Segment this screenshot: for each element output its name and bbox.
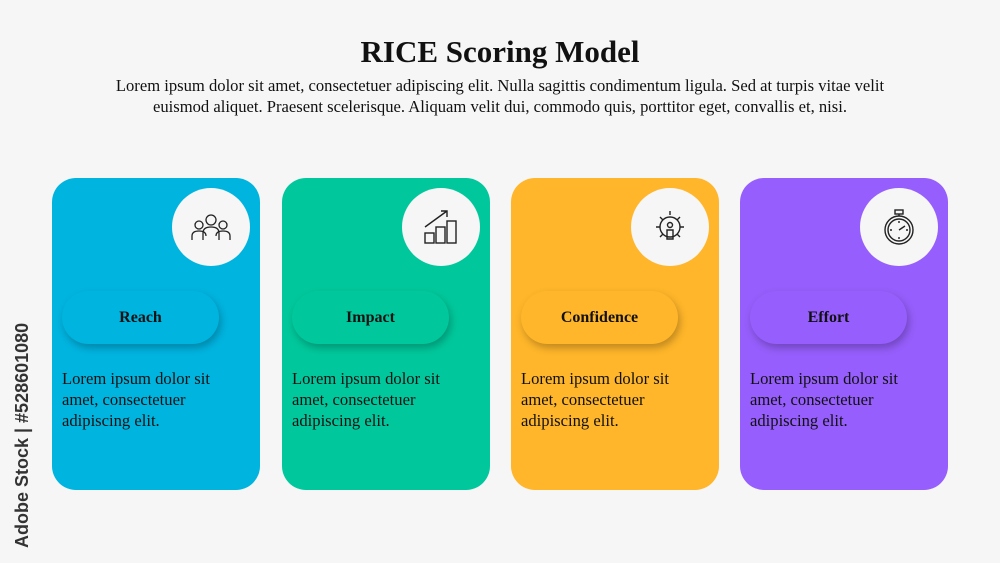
text: Lorem ipsum dolor sit amet, consectetuer adipiscing elit. (62, 369, 210, 430)
text: Lorem ipsum dolor sit amet, consectetuer adipiscing elit. (750, 369, 898, 430)
icon: lightbulb (631, 188, 709, 266)
text: Lorem ipsum dolor sit amet, consectetuer adipiscing elit. (521, 369, 669, 430)
pill: Effort: Effort (808, 308, 849, 326)
pill: Confidence: Confidence (561, 308, 638, 326)
panel: impact (282, 178, 490, 490)
text: Lorem ipsum dolor sit amet, consectetuer adipiscing elit. (292, 369, 440, 430)
subtitle: Lorem ipsum dolor sit amet, consectetuer adipiscing elit. Nulla sagittis condimentum ligula. Sed at turpis vitae velit (116, 76, 884, 95)
pill: Reach (62, 291, 219, 344)
pill: Confidence (521, 291, 678, 344)
title: RICE Scoring Model (360, 34, 640, 69)
subtitle: euismod aliquet. Praesent scelerisque. Aliquam velit dui, commodo quis, porttitor eget, convallis et, nisi. (153, 97, 847, 116)
pill: Impact (292, 291, 449, 344)
subtitle (116, 76, 884, 116)
pill: Effort (750, 291, 907, 344)
icon: people (172, 188, 250, 266)
pill: Reach: Reach (119, 308, 162, 326)
side watermark text: Adobe Stock | #528601080 (12, 323, 32, 548)
panel: reach (52, 178, 260, 490)
icon: chart (402, 188, 480, 266)
icon: stopwatch (860, 188, 938, 266)
panel: effort (740, 178, 948, 490)
panel: confidence (511, 178, 719, 490)
pill: Impact: Impact (346, 308, 395, 326)
